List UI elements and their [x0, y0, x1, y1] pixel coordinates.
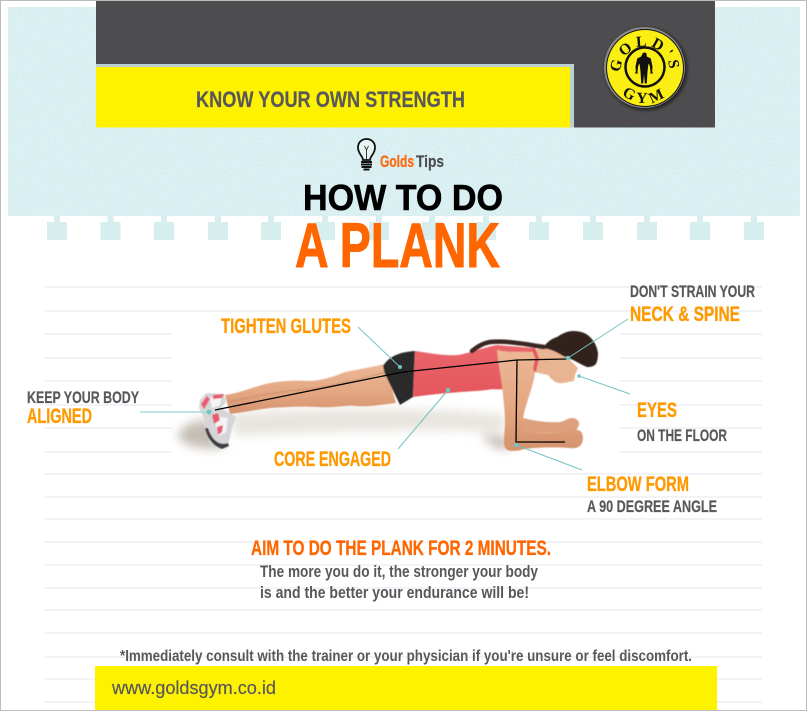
- icon: Gold's Gym logo: [604, 26, 688, 112]
- panel: textured teal header background: [8, 7, 800, 216]
- photo: woman holding a plank: [178, 331, 598, 451]
- panel: yellow footer: [95, 666, 717, 710]
- label: core engaged: CORE ENGAGED: [274, 448, 391, 471]
- leader lines: [140, 319, 630, 470]
- label: keep your body aligned: ALIGNED: [27, 405, 92, 428]
- shoe sole: [205, 428, 229, 449]
- website: www.goldsgym.co.id: [111, 678, 276, 698]
- disclaimer: *Immediately consult with the trainer or your physician if you're unsure or feel discomfort.: [120, 648, 692, 665]
- far forearm: [523, 418, 579, 433]
- brand: Golds Tips: Tips: [416, 152, 444, 171]
- callout: aim for two minutes: is and the better your endurance will be!: [260, 584, 529, 602]
- label: keep your body aligned: [27, 388, 139, 428]
- near and far shoe: [199, 393, 236, 449]
- icon: Gold's Gym logo: GYM: [624, 88, 664, 104]
- notebook binding tabs: [47, 216, 764, 240]
- legs: [225, 364, 396, 414]
- panel: dark header block: [96, 1, 715, 128]
- callout: aim for two minutes: The more you do it, the stronger your body: [260, 563, 539, 581]
- label: elbow form: ELBOW FORM: [587, 473, 689, 496]
- label: eyes: ON THE FLOOR: [637, 426, 727, 445]
- callout: aim for two minutes: AIM TO DO THE PLANK FOR 2 MINUTES.: [251, 537, 551, 560]
- body alignment lines: [215, 359, 567, 442]
- tank strap: [532, 348, 539, 372]
- icon: Gold's Gym logo: GOLD'S: [610, 36, 680, 71]
- title: how to do: HOW TO DO: [303, 177, 503, 218]
- callout: aim for two minutes: [251, 537, 551, 602]
- gap between legs: [228, 372, 386, 402]
- tagline: KNOW YOUR OWN STRENGTH: [196, 87, 465, 112]
- label: elbow form: [587, 473, 717, 516]
- label: neck and spine: NECK & SPINE: [630, 303, 740, 326]
- brand: Golds Tips: Golds: [380, 152, 414, 171]
- label: eyes: EYES: [637, 399, 677, 422]
- title: a plank: A PLANK: [295, 211, 500, 281]
- shoe white panels: [210, 396, 228, 436]
- floor shadow: [178, 408, 510, 450]
- label: neck and spine: [630, 282, 755, 326]
- label: tighten glutes: TIGHTEN GLUTES: [221, 315, 351, 338]
- braid: [472, 342, 544, 351]
- near arm and shoulder: [497, 350, 583, 451]
- notebook ruled lines: [45, 287, 762, 702]
- label: elbow form: A 90 DEGREE ANGLE: [587, 497, 717, 516]
- shorts: [383, 351, 415, 405]
- panel: yellow tagline banner: [96, 64, 574, 128]
- hair: [543, 331, 598, 367]
- icon: light bulb: [358, 139, 375, 170]
- neck and face: [534, 346, 578, 383]
- shoe pink accents: [201, 394, 224, 435]
- tank top: [413, 345, 538, 397]
- label: eyes: [637, 399, 727, 445]
- label: keep your body aligned: KEEP YOUR BODY: [27, 388, 139, 407]
- label: neck and spine: DON'T STRAIN YOUR: [630, 282, 755, 301]
